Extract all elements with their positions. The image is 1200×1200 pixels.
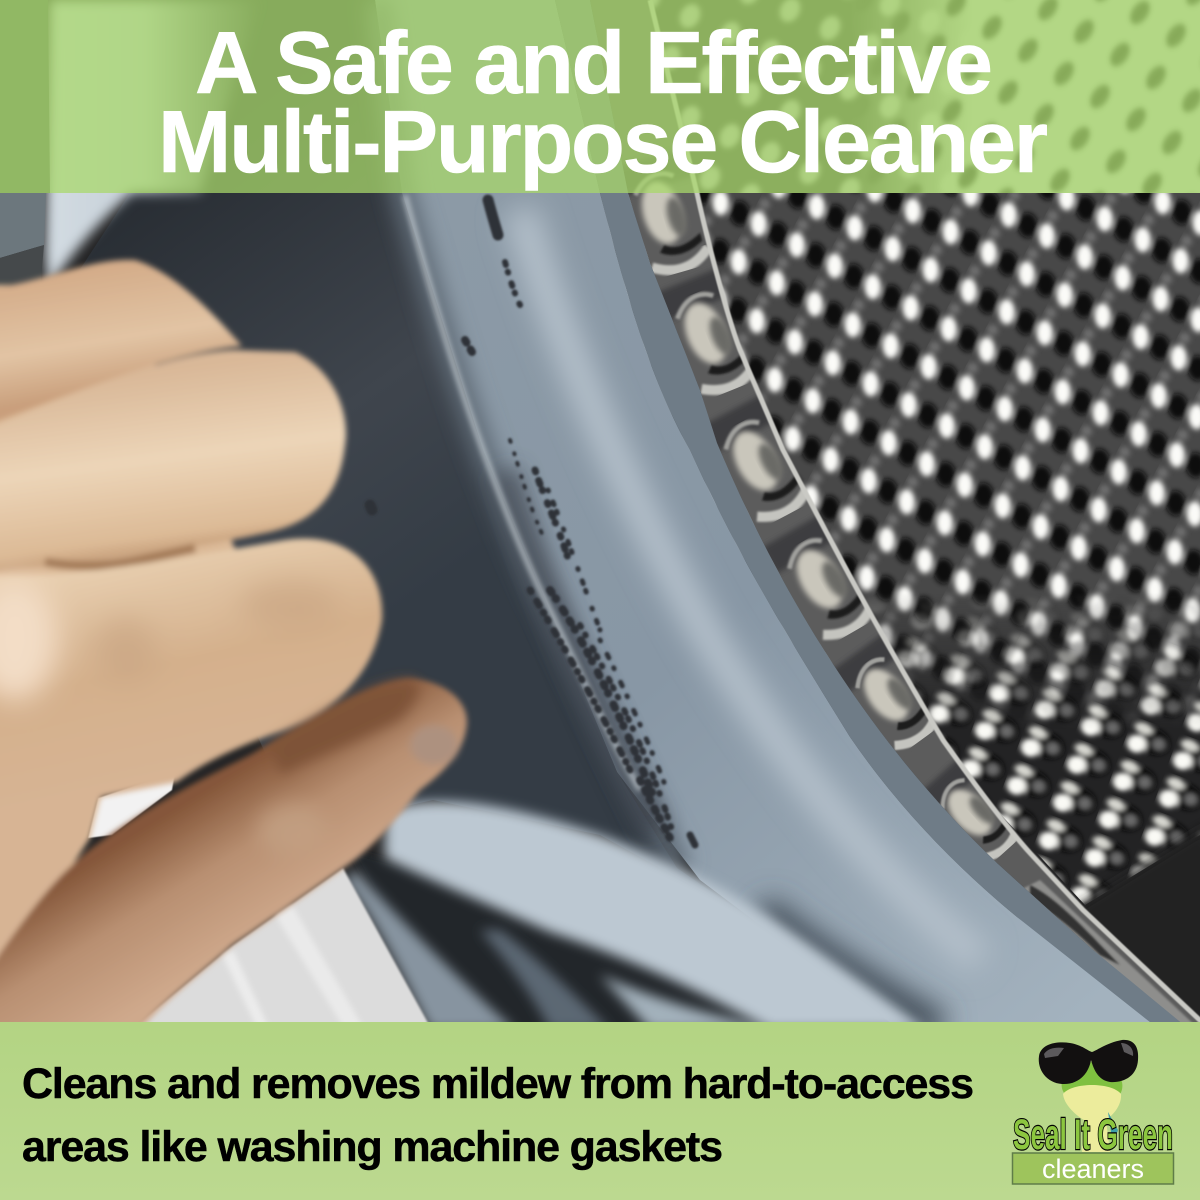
white machine body — [130, 868, 432, 1030]
logo cleaners box: cleaners — [1042, 1154, 1144, 1184]
knuckle shadow — [98, 618, 148, 664]
logo: Seal It Green cleaners — [1012, 1040, 1174, 1184]
gasket: shadow above lower fold — [760, 910, 940, 1030]
gasket: darker outer edge band — [555, 0, 1190, 1030]
drum lip: embossed metal band — [590, 0, 1200, 1030]
crease between middle and ring finger — [45, 548, 195, 566]
little finger dark tip — [270, 680, 419, 775]
drum: perforated stainless steel, upper — [600, 193, 1200, 760]
gap of white between fingers — [88, 772, 175, 838]
knuckle highlight — [256, 800, 314, 844]
gasket: ridge highlight — [405, 195, 640, 790]
folds below the lower tube — [345, 862, 763, 1022]
ring finger — [0, 534, 386, 800]
lip scallops — [613, 146, 1200, 1030]
drum: perforated steel behind header, out of focus — [620, 0, 1200, 193]
lip bright inner edge — [650, 0, 1200, 1025]
light gasket strip, top left — [40, 0, 240, 280]
lower gasket tube — [385, 801, 925, 1030]
gasket: soft transition along the ridge — [378, 0, 680, 868]
grey machine corner, top left — [0, 0, 50, 290]
palm base — [0, 281, 238, 876]
palm highlight — [0, 580, 57, 700]
drum: dark shadow in the lower right corner — [1076, 830, 1200, 905]
mildew spots — [370, 200, 695, 845]
little finger — [0, 678, 467, 1030]
index finger — [0, 260, 242, 424]
hand — [0, 260, 467, 1030]
logo mascot: sunglasses — [1039, 1040, 1138, 1084]
caption line 1: Cleans and removes mildew from hard-to-access — [22, 1060, 974, 1108]
header band: translucent green overlay — [0, 0, 1200, 193]
caption line 2: areas like washing machine gaskets — [22, 1123, 723, 1171]
gasket: mildew haze — [505, 470, 655, 830]
logo cleaners box — [1012, 1153, 1174, 1184]
drum: perforated stainless steel, lower — [867, 598, 1200, 905]
title line 2: Multi-Purpose Cleaner — [158, 92, 1048, 191]
middle finger — [0, 350, 346, 572]
gasket: dark inner fold — [82, 193, 676, 866]
logo mascot: frog body — [1062, 1058, 1122, 1152]
footer band — [0, 1022, 1200, 1200]
title — [158, 13, 1048, 191]
footer caption — [22, 1060, 974, 1171]
fingernail highlight — [410, 725, 458, 765]
gasket: soft highlight on rubber — [520, 210, 980, 960]
gasket: main light rubber surface — [375, 0, 1160, 1030]
title line 1: A Safe and Effective — [195, 13, 993, 112]
